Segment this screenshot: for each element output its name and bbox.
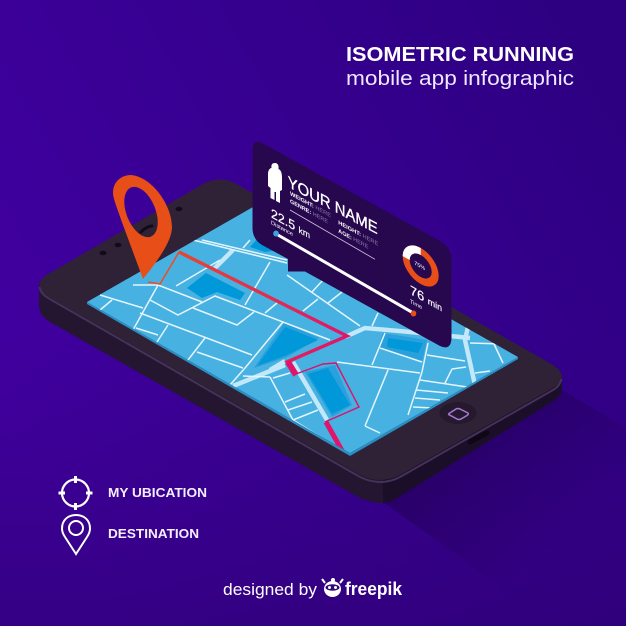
age: AGE: HERE [338,229,368,251]
silhouette [268,163,282,203]
route [148,252,359,456]
divider [290,210,375,259]
phone shadow [383,390,626,626]
height: HEIGHT: HERE [338,220,378,248]
screen edge [87,302,518,456]
thin loop [296,363,359,422]
name: YOUR NAME [288,173,378,238]
freepik wordmark: freepik [345,579,403,599]
home button [440,402,476,424]
footer designed by: designed by [223,580,318,599]
distance value: 22.5 km [271,205,310,242]
map base [80,200,525,460]
freepik logo [322,578,343,597]
destination pin [113,175,172,279]
streets [100,240,503,452]
speaker dots [100,207,182,255]
genre: GENRE: HERE [290,199,328,225]
donut chart [406,244,435,288]
icon: location pin [62,515,90,554]
card body [252,142,452,347]
wide roads [213,250,475,420]
phone left side [39,283,383,503]
map screen [80,200,525,460]
final leg [326,422,345,456]
phone [39,179,562,503]
charging port [470,433,487,442]
phone right side [383,376,562,503]
destination label: DESTINATION [108,526,199,541]
title: ISOMETRIC RUNNING [346,44,574,66]
thick route [179,252,347,374]
my ubication label: MY UBICATION [108,485,207,500]
phone bevel [40,287,562,482]
progress bar [273,230,416,316]
time value: 76 min [410,282,442,314]
time label: Time [410,299,423,312]
weight: WEIGHT: HERE [290,191,331,219]
orange connector [148,252,179,284]
info card [252,142,452,347]
distance label: Distance [271,220,294,238]
phone top face [39,179,562,480]
donut value: 75% [414,261,426,273]
subtitle: mobile app infographic [346,68,574,90]
icon: crosshair [58,476,92,510]
wide step [288,362,296,375]
ponds [187,238,427,417]
